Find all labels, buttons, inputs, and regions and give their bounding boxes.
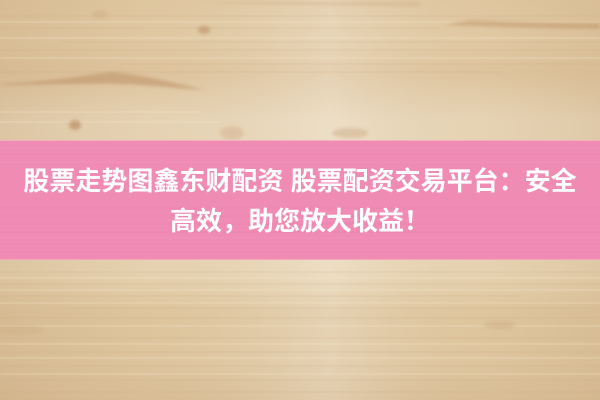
title line 1: 股票走势图鑫东财配资 股票配资交易平台：安全	[23, 166, 577, 196]
pink title band	[0, 140, 600, 260]
title line 2: 高效，助您放大收益！	[170, 206, 430, 236]
